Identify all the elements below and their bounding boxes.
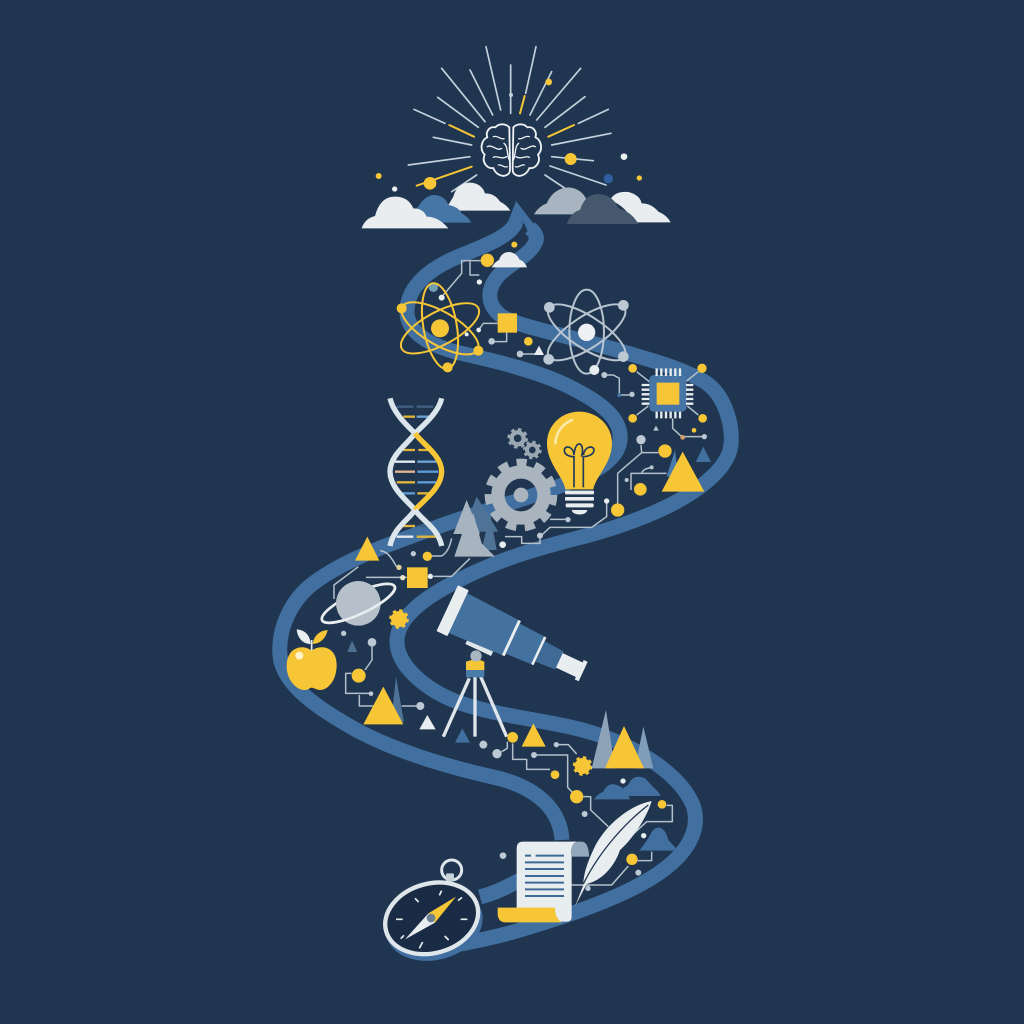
icon: trees xyxy=(453,497,498,557)
cloud: dark slate xyxy=(567,194,638,224)
compass base shadow xyxy=(377,877,491,971)
icon: quill feather xyxy=(575,801,652,907)
icon: brain xyxy=(482,124,541,176)
triangles right of bulb xyxy=(662,447,711,492)
icon: compass xyxy=(377,860,487,965)
square node xyxy=(498,313,517,333)
cloud: blue xyxy=(410,195,471,223)
icon: mountains xyxy=(592,710,653,768)
node dots around bulb xyxy=(499,372,707,548)
cloud: grey xyxy=(534,187,587,214)
bottom section: mountains, scroll, feather, compass xyxy=(377,710,678,971)
circuit and atoms section xyxy=(394,242,633,375)
circuit traces lower xyxy=(502,742,672,885)
circuit traces near planet xyxy=(334,538,470,706)
icon: DNA helix xyxy=(390,398,442,546)
blue hill xyxy=(639,827,678,851)
icon: yellow cog xyxy=(574,757,591,775)
triangles below apple xyxy=(363,677,470,743)
cloud: small white xyxy=(492,252,527,267)
icon: ringed planet xyxy=(318,577,399,630)
cloud: white right xyxy=(610,192,671,222)
icon: white atom xyxy=(540,290,633,375)
square node with dots xyxy=(396,551,433,588)
icon: large gear xyxy=(489,463,553,527)
middle section: chip, bulb, gears, DNA xyxy=(390,364,711,557)
icon: scroll xyxy=(498,842,589,922)
scattered dots xyxy=(376,79,642,192)
ribbon: winding river path xyxy=(280,201,731,950)
cloud: white centre xyxy=(445,183,510,211)
icon: apple xyxy=(287,629,337,690)
icon: yellow cog xyxy=(390,610,408,628)
circuit traces around bulb xyxy=(505,375,704,543)
icon: yellow atom xyxy=(394,280,486,372)
icon: small gears xyxy=(509,429,540,458)
top section: brain, rays, clouds xyxy=(362,47,671,267)
sunburst rays xyxy=(408,47,611,192)
clouds: blue pair xyxy=(594,777,661,799)
cloud: white left xyxy=(362,197,448,228)
node dots near atoms xyxy=(429,242,544,357)
node dots lower xyxy=(479,732,666,891)
circuit traces near atoms xyxy=(443,261,537,354)
triangle marker xyxy=(522,723,546,747)
small symbols near apple xyxy=(341,631,424,710)
left section: planet, apple, telescope xyxy=(287,537,594,743)
icon: telescope xyxy=(437,585,594,737)
icon: light bulb xyxy=(547,412,612,514)
triangle marker xyxy=(355,537,379,561)
icon: chip xyxy=(628,364,707,423)
